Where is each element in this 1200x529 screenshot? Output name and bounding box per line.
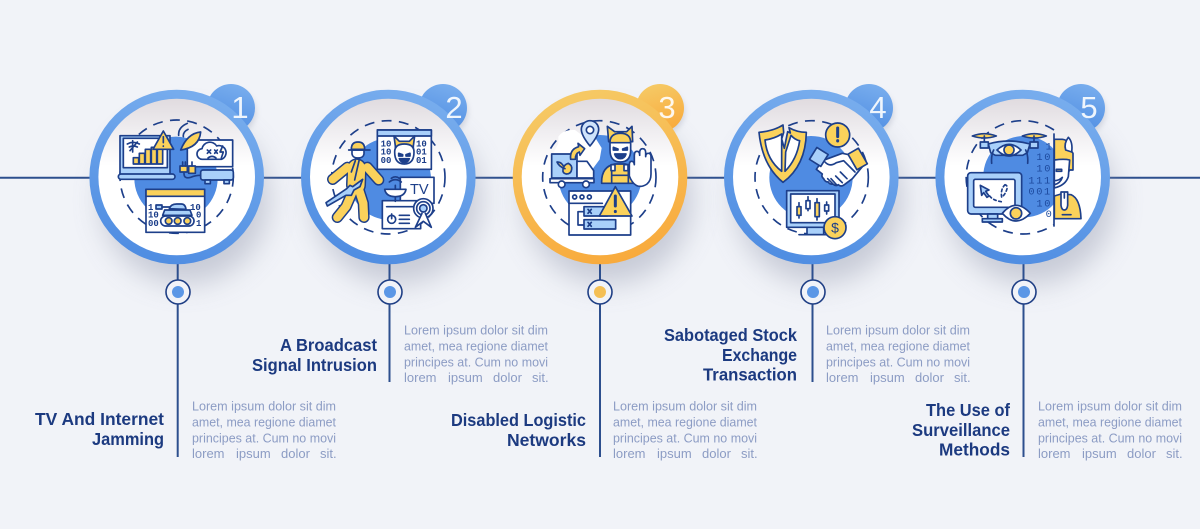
body 5: Lorem ipsum dolor sit dim xyxy=(1038,398,1182,414)
icon: surveillance: 10 xyxy=(1036,199,1052,211)
icon: broadcast intrusion: 10 xyxy=(416,140,427,150)
title 4: Exchange xyxy=(722,345,797,365)
body 2: sit. xyxy=(532,370,549,385)
body 4: Lorem ipsum dolor sit dim xyxy=(826,322,970,338)
icon: broadcast intrusion: TV xyxy=(410,182,429,198)
badge 2 xyxy=(419,84,468,134)
node 4 xyxy=(801,280,825,304)
icon: surveillance xyxy=(966,121,1081,234)
ring 2 xyxy=(301,90,476,264)
title 3: Networks xyxy=(507,430,586,450)
body 2: lorem xyxy=(404,370,437,385)
body 2 xyxy=(404,322,549,385)
step 5 xyxy=(912,84,1183,461)
body 5: sit. xyxy=(1166,446,1183,461)
step 2 xyxy=(252,84,549,385)
body 2: amet, mea regione diamet xyxy=(404,338,548,354)
connector 1 xyxy=(177,260,179,457)
icon: surveillance: 001 xyxy=(1028,186,1052,198)
ring 5 xyxy=(935,90,1110,264)
icon: jamming devices: 0 xyxy=(196,211,201,221)
icon: broadcast intrusion: 10 xyxy=(381,140,391,150)
title 5: Methods xyxy=(939,440,1010,460)
badge 3 xyxy=(636,84,685,134)
title 2: Signal Intrusion xyxy=(252,355,377,375)
ring 3 xyxy=(513,90,687,264)
horizontal timeline xyxy=(0,177,1200,179)
body 5 xyxy=(1038,398,1183,461)
icon: surveillance: 10 xyxy=(1036,163,1052,175)
icon: broadcast intrusion: 00 xyxy=(381,156,391,166)
body 1: dolor xyxy=(281,446,311,461)
body 3: Lorem ipsum dolor sit dim xyxy=(613,398,757,414)
icon: broadcast intrusion: 10 xyxy=(381,148,391,158)
title 1: Jamming xyxy=(92,429,164,449)
body 4: amet, mea regione diamet xyxy=(826,338,970,354)
body 3 xyxy=(613,398,758,461)
shadow 2 xyxy=(313,116,481,284)
ring 4 xyxy=(724,90,899,264)
body 4: ipsum xyxy=(870,370,905,385)
number 5: 5 xyxy=(1080,90,1098,125)
number 3: 3 xyxy=(658,90,676,125)
connector 5 xyxy=(1022,260,1024,457)
title 2: A Broadcast xyxy=(280,335,377,355)
step 3 xyxy=(451,84,758,461)
number 4: 4 xyxy=(869,90,887,125)
body 3: lorem xyxy=(613,446,646,461)
body 1: principes at. Cum no movi xyxy=(192,430,336,446)
shadow 5 xyxy=(947,116,1115,284)
title 4: Transaction xyxy=(703,364,797,384)
icon: surveillance: 111 xyxy=(1028,175,1052,187)
icon: surveillance: 0 xyxy=(1046,209,1054,221)
badge 1 xyxy=(207,84,256,134)
body 5: principes at. Cum no movi xyxy=(1038,430,1182,446)
icon: jamming devices: 1 xyxy=(148,203,154,213)
connector 2 xyxy=(388,260,390,382)
body 2: Lorem ipsum dolor sit dim xyxy=(404,322,548,338)
icon: sabotaged stock exchange xyxy=(755,121,868,239)
icon: broadcast intrusion: 01 xyxy=(416,148,427,158)
node 5 xyxy=(1012,280,1036,304)
node 2 xyxy=(378,280,402,304)
icon: broadcast intrusion xyxy=(326,121,445,234)
shadow 1 xyxy=(101,116,269,284)
body 3: amet, mea regione diamet xyxy=(613,414,757,430)
body 1: lorem xyxy=(192,446,225,461)
body 1: amet, mea regione diamet xyxy=(192,414,336,430)
icon: disabled logistics xyxy=(543,121,656,235)
connector 3 xyxy=(599,260,601,457)
badge 4 xyxy=(845,84,894,134)
worker figure xyxy=(333,167,379,217)
body 1: Lorem ipsum dolor sit dim xyxy=(192,398,336,414)
body 3: dolor xyxy=(702,446,732,461)
body 5: amet, mea regione diamet xyxy=(1038,414,1182,430)
body 3: principes at. Cum no movi xyxy=(613,430,757,446)
title 5: Surveillance xyxy=(912,420,1010,440)
step 1 xyxy=(35,84,337,461)
icon: sabotaged stock exchange: $ xyxy=(831,220,839,236)
body 4: dolor xyxy=(915,370,945,385)
badge 5 xyxy=(1057,84,1106,134)
icon: surveillance: 10 xyxy=(1036,152,1052,164)
body 3: sit. xyxy=(741,446,758,461)
node 1 xyxy=(166,280,190,304)
title 4: Sabotaged Stock xyxy=(664,325,797,345)
body 2: dolor xyxy=(493,370,523,385)
body 5: dolor xyxy=(1127,446,1157,461)
body 4: principes at. Cum no movi xyxy=(826,354,970,370)
body 1: sit. xyxy=(320,446,337,461)
body 3: ipsum xyxy=(657,446,692,461)
body 1 xyxy=(192,398,337,461)
body 4: sit. xyxy=(954,370,971,385)
number 2: 2 xyxy=(445,90,463,125)
shadow 3 xyxy=(524,116,692,284)
icon: jamming devices: 1 xyxy=(196,219,202,229)
icon: jamming devices: 00 xyxy=(148,219,159,229)
icon: jamming devices xyxy=(118,120,233,233)
title 3: Disabled Logistic xyxy=(451,410,586,430)
body 1: ipsum xyxy=(236,446,271,461)
body 4: lorem xyxy=(826,370,859,385)
title 1: TV And Internet xyxy=(35,409,164,429)
node 3 xyxy=(588,280,612,304)
ring 1 xyxy=(89,90,264,264)
connector 4 xyxy=(812,260,814,382)
body 2: ipsum xyxy=(448,370,483,385)
body 4 xyxy=(826,322,971,385)
number 1: 1 xyxy=(231,90,249,125)
body 5: ipsum xyxy=(1082,446,1117,461)
body 5: lorem xyxy=(1038,446,1071,461)
icon: surveillance: 1 xyxy=(1046,141,1054,153)
icon: jamming devices: 10 xyxy=(190,203,201,213)
title 5: The Use of xyxy=(926,400,1010,420)
icon: jamming devices: 10 xyxy=(148,211,159,221)
step 4 xyxy=(664,84,971,385)
shadow 4 xyxy=(735,116,903,284)
icon: broadcast intrusion: 01 xyxy=(416,156,427,166)
body 2: principes at. Cum no movi xyxy=(404,354,548,370)
